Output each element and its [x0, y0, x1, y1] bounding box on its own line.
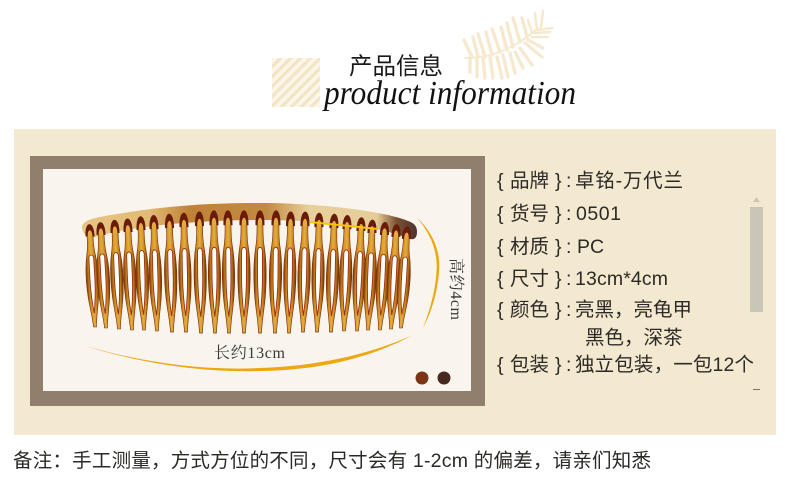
footnote: 备注：手工测量，方式方位的不同，尺寸会有 1-2cm 的偏差，请亲们知悉 — [13, 450, 651, 472]
width label: 长约13cm — [214, 344, 286, 362]
row: brand: : — [566, 170, 571, 192]
row: item number: { — [497, 203, 504, 225]
row: brand: } — [555, 170, 562, 192]
height measure arc — [417, 218, 439, 328]
width measure arc — [82, 335, 413, 371]
panel: product photo frame — [30, 156, 485, 406]
scrollbar thumb — [750, 207, 763, 312]
row: size: { — [497, 268, 504, 290]
heading: chinese: 产品信息 — [349, 53, 443, 79]
comb highlight — [310, 222, 378, 229]
heading: english: product information — [322, 75, 576, 112]
title block — [272, 11, 576, 112]
row: packaging: 包装 — [510, 354, 549, 376]
hair comb — [82, 203, 417, 333]
icon: palm leaf — [464, 11, 552, 78]
row: item number: : — [566, 203, 571, 225]
row: size: 13cm*4cm — [575, 268, 668, 290]
scrollbar up arrow — [753, 197, 760, 202]
colour swatch: dark — [438, 372, 450, 384]
row: item number: 货号 — [510, 203, 549, 225]
row: packaging: } — [555, 354, 562, 376]
product details list — [497, 170, 754, 376]
row: colour: 亮黑，亮龟甲 — [575, 299, 692, 321]
row: material: } — [555, 236, 562, 258]
row: packaging: : — [566, 354, 571, 376]
row: brand: 卓铭-万代兰 — [575, 170, 683, 192]
row: size: : — [566, 268, 571, 290]
comb spine — [82, 203, 417, 239]
row: packaging: 独立包装，一包12个 — [575, 354, 754, 376]
row: item number: 0501 — [576, 203, 621, 225]
row: size: 尺寸 — [510, 268, 549, 290]
row: colour: { — [497, 299, 504, 321]
row: size: } — [555, 268, 562, 290]
row: material: : — [566, 236, 571, 258]
row: colour: } — [555, 299, 562, 321]
photo background — [43, 169, 471, 391]
row: colour: 颜色 — [510, 299, 549, 321]
frame border — [30, 156, 485, 406]
scrollbar — [750, 197, 763, 390]
colour swatch: brown — [416, 372, 428, 384]
row: packaging: { — [497, 354, 504, 376]
panel: beige background — [14, 129, 776, 435]
row: material: 材质 — [510, 236, 549, 258]
height label: 高约4cm — [447, 258, 466, 321]
row: item number: } — [555, 203, 562, 225]
scrollbar end mark — [753, 389, 760, 390]
row: brand: 品牌 — [510, 170, 549, 192]
row: brand: { — [497, 170, 504, 192]
row: colour continued: 黑色，深茶 — [585, 327, 683, 349]
row: material: PC — [577, 236, 604, 258]
comb teeth — [83, 210, 413, 333]
decorative hatched square — [272, 58, 320, 107]
row: colour: : — [566, 299, 571, 321]
row: material: { — [497, 236, 504, 258]
